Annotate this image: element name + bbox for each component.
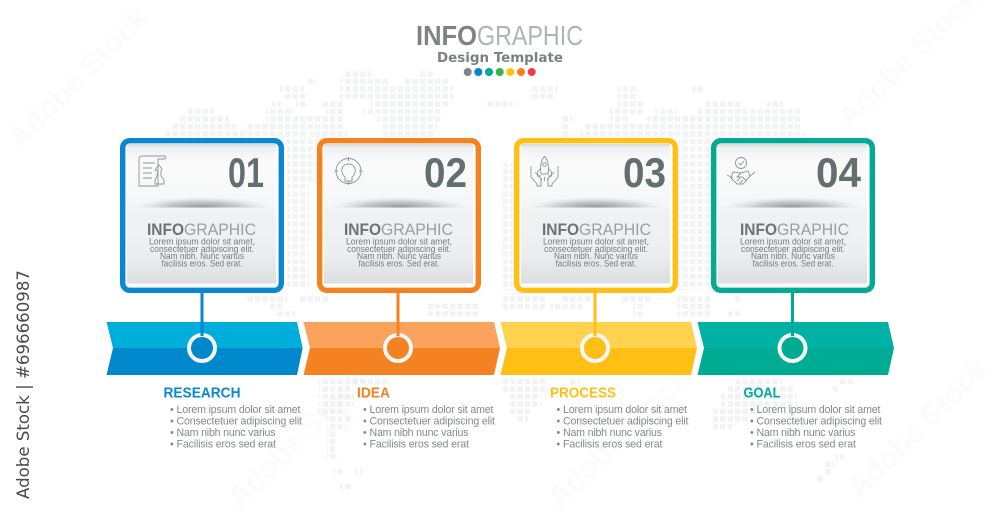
panel: card 04: GRAPHIC [777, 220, 849, 239]
color dots row [464, 68, 536, 76]
text block: research: Nam nibh nunc varius [176, 427, 276, 439]
text block: goal: • [750, 404, 754, 416]
text block: research: • [170, 427, 174, 439]
icon: handshake with check [727, 158, 755, 184]
text block: research: • [170, 404, 174, 416]
stock id label: Adobe Stock | #696660987 [14, 270, 34, 499]
arrow segment: process [500, 322, 697, 375]
text block: research: Consectetuer adipiscing elit [176, 416, 302, 428]
text block: process: • [556, 427, 560, 439]
text block: goal: Consectetuer adipiscing elit [756, 416, 882, 428]
text block: process: PROCESS [550, 384, 616, 402]
text block: idea: Consectetuer adipiscing elit [370, 416, 495, 428]
title: INFO [416, 20, 477, 51]
text block: goal: GOAL [744, 384, 780, 402]
panel: card 01: 01 [228, 149, 264, 196]
text block: idea: Lorem ipsum dolor sit amet [370, 404, 494, 416]
title [416, 20, 583, 66]
arrow segment: idea [304, 322, 500, 375]
icon: rocket over hands [531, 156, 558, 186]
text block: goal: Facilisis eros sed erat [756, 438, 856, 450]
connector and node: process [582, 293, 608, 361]
panel: card 03: GRAPHIC [579, 220, 651, 239]
text block: goal: • [750, 416, 754, 428]
text block: idea: • [363, 416, 367, 428]
panel: card 03: INFO [542, 220, 579, 239]
panel: card 03: consectetuer adipiscing elit. [544, 244, 648, 254]
arrow segment: goal [698, 322, 894, 375]
text block: research: RESEARCH [164, 384, 240, 402]
arrow segment: research [106, 322, 303, 375]
text block: process: Lorem ipsum dolor sit amet [563, 404, 687, 416]
title: GRAPHIC [477, 20, 583, 51]
text block: process: Facilisis eros sed erat [563, 438, 663, 450]
panel: card 03: Nam nibh. Nunc varius [554, 251, 639, 261]
panel: card 02: facilisis eros. Sed erat. [358, 258, 440, 268]
text block: goal: Lorem ipsum dolor sit amet [756, 404, 881, 416]
panel: card 04: INFO [740, 220, 777, 239]
text block: process: • [556, 416, 560, 428]
panel: card 03 [517, 141, 675, 290]
text block: process: Nam nibh nunc varius [563, 427, 662, 439]
panel: card 02: GRAPHIC [381, 220, 453, 239]
text block: research: • [170, 416, 174, 428]
text block: process: Consectetuer adipiscing elit [563, 416, 689, 428]
panel: card 04 [714, 141, 872, 290]
text block: goal: Nam nibh nunc varius [756, 427, 856, 439]
text block: goal: • [750, 438, 754, 450]
panel: card 04: 04 [816, 149, 862, 196]
text block: goal: • [750, 427, 754, 439]
text block: research: • [170, 438, 174, 450]
panel: card 04: Nam nibh. Nunc varius [751, 251, 836, 261]
panel: card 01: INFO [147, 220, 184, 239]
connector and node: goal [780, 293, 806, 361]
icon: document with chess piece [139, 156, 166, 186]
text block: idea: • [363, 404, 367, 416]
panel: card 01: Lorem ipsum dolor sit amet, [149, 236, 255, 246]
panel: card 02: INFO [344, 220, 381, 239]
text block: research [164, 384, 302, 450]
background: dotted world map [165, 70, 855, 490]
panel: card 02: 02 [424, 149, 467, 196]
text block: research: Facilisis eros sed erat [176, 438, 276, 450]
text block: process: • [556, 404, 560, 416]
title: Design Template [437, 51, 563, 66]
panel: card 02 [320, 141, 478, 290]
panel: card 04: Lorem ipsum dolor sit amet, [740, 236, 846, 246]
connector and node: idea [385, 293, 411, 361]
text block: idea: IDEA [357, 384, 390, 402]
text block: process: • [556, 438, 560, 450]
panel: card 02: consectetuer adipiscing elit. [347, 244, 451, 254]
panel: card 03: facilisis eros. Sed erat. [556, 258, 636, 268]
panel: card 01: consectetuer adipiscing elit. [150, 244, 254, 254]
panel: card 04: consectetuer adipiscing elit. [741, 244, 845, 254]
text block: idea: Nam nibh nunc varius [370, 427, 468, 439]
panel: card 01 [123, 141, 281, 290]
panel: card 04: facilisis eros. Sed erat. [752, 258, 834, 268]
panel: card 01: Nam nibh. Nunc varius [160, 251, 245, 261]
text block: idea: Facilisis eros sed erat [370, 438, 469, 450]
text block: process [550, 384, 689, 450]
panel: card 02: Lorem ipsum dolor sit amet, [346, 236, 452, 246]
text block: idea: • [363, 427, 367, 439]
panel: card 03: Lorem ipsum dolor sit amet, [543, 236, 649, 246]
connector and node: research [189, 293, 215, 361]
text block: idea: • [363, 438, 367, 450]
panel: card 01: GRAPHIC [184, 220, 256, 239]
text block: goal [744, 384, 882, 450]
panel: card 03: 03 [623, 149, 666, 196]
panel: card 02: Nam nibh. Nunc varius [357, 251, 442, 261]
text block: idea [357, 384, 495, 450]
panel: card 01: facilisis eros. Sed erat. [162, 258, 242, 268]
text block: research: Lorem ipsum dolor sit amet [176, 404, 301, 416]
icon: light bulb [334, 157, 362, 185]
